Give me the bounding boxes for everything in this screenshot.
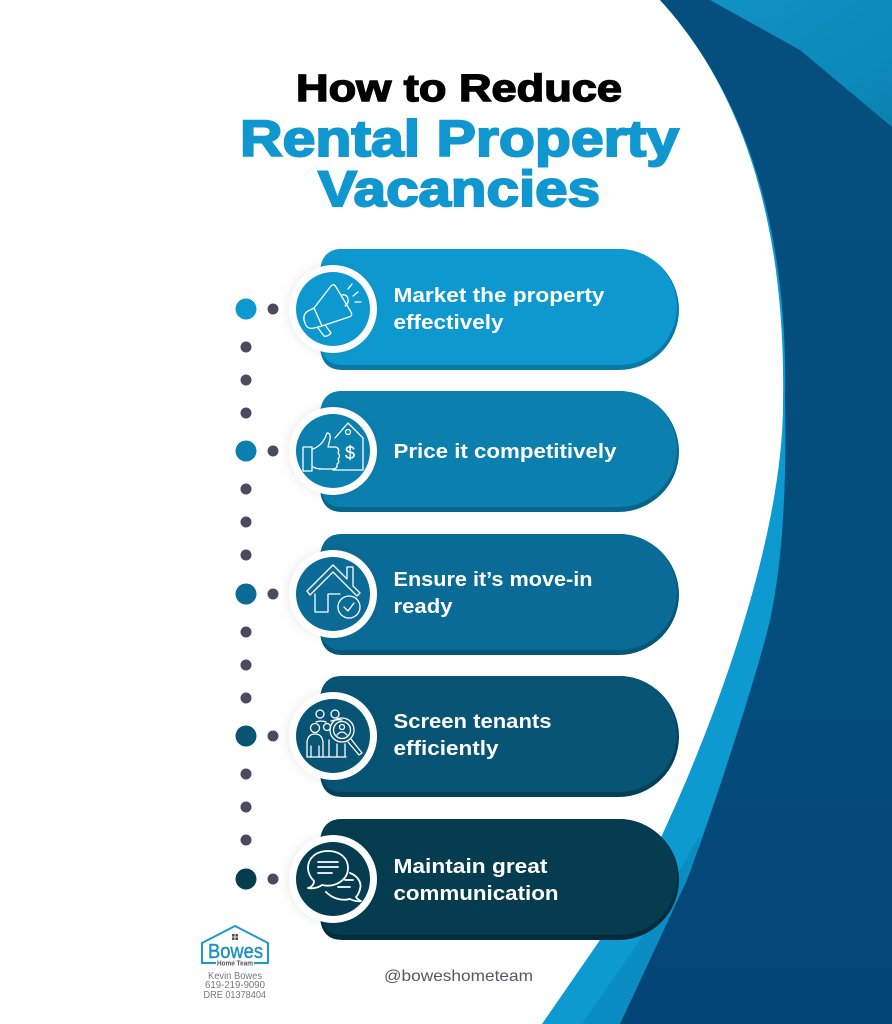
label: move-in ready: ready: [394, 596, 453, 618]
timeline dots: [236, 298, 278, 890]
label: market the property: [394, 285, 605, 334]
logo: tagline: Home Team: [217, 958, 253, 968]
logo: window: [232, 934, 238, 940]
icon: chat bubbles: [308, 851, 361, 901]
contact details: DRE 01378404: [204, 990, 266, 1001]
label: market the property: Market the property: [394, 285, 605, 307]
label: move-in ready: [394, 569, 592, 618]
background: curved blue panel: [542, 0, 892, 1024]
icon: house with check mark: [307, 565, 360, 618]
logo: house outline: [202, 926, 268, 963]
panel: price competitively: [289, 391, 679, 512]
title: [240, 68, 680, 217]
title line: Rental Property: Rental Property: [240, 110, 680, 167]
icon: thumbs up with price tag: [303, 423, 363, 471]
panel: market the property: [289, 249, 679, 370]
icon: megaphone: [304, 284, 361, 336]
logo: Bowes Home Team: [202, 926, 268, 968]
label: great communication: communication: [394, 883, 558, 905]
contact details: 619-219-9090: [205, 980, 265, 991]
title line: Vacancies: Vacancies: [318, 161, 600, 217]
icon: thumbs up with price tag: $: [345, 443, 355, 463]
label: price competitively: Price it competitively: [394, 441, 617, 463]
label: screen tenants: [394, 711, 552, 760]
label: screen tenants: Screen tenants: [394, 711, 552, 733]
title line: How to Reduce: How to Reduce: [296, 68, 622, 110]
label: screen tenants: efficiently: [394, 738, 499, 760]
icon: people under magnifying glass: [307, 710, 362, 757]
panel: screen tenants: [289, 676, 679, 797]
social handle: @boweshometeam: [384, 968, 533, 985]
panel: move-in ready: [289, 534, 679, 655]
label: great communication: [394, 856, 558, 905]
label: move-in ready: Ensure it’s move-in: [394, 569, 592, 591]
contact details: Kevin Bowes: [208, 971, 262, 982]
logo: wordmark: Bowes: [208, 941, 263, 963]
panel: great communication: [289, 819, 679, 940]
label: great communication: Maintain great: [394, 856, 548, 878]
label: market the property: effectively: [394, 312, 504, 334]
contact details: [204, 971, 266, 1001]
